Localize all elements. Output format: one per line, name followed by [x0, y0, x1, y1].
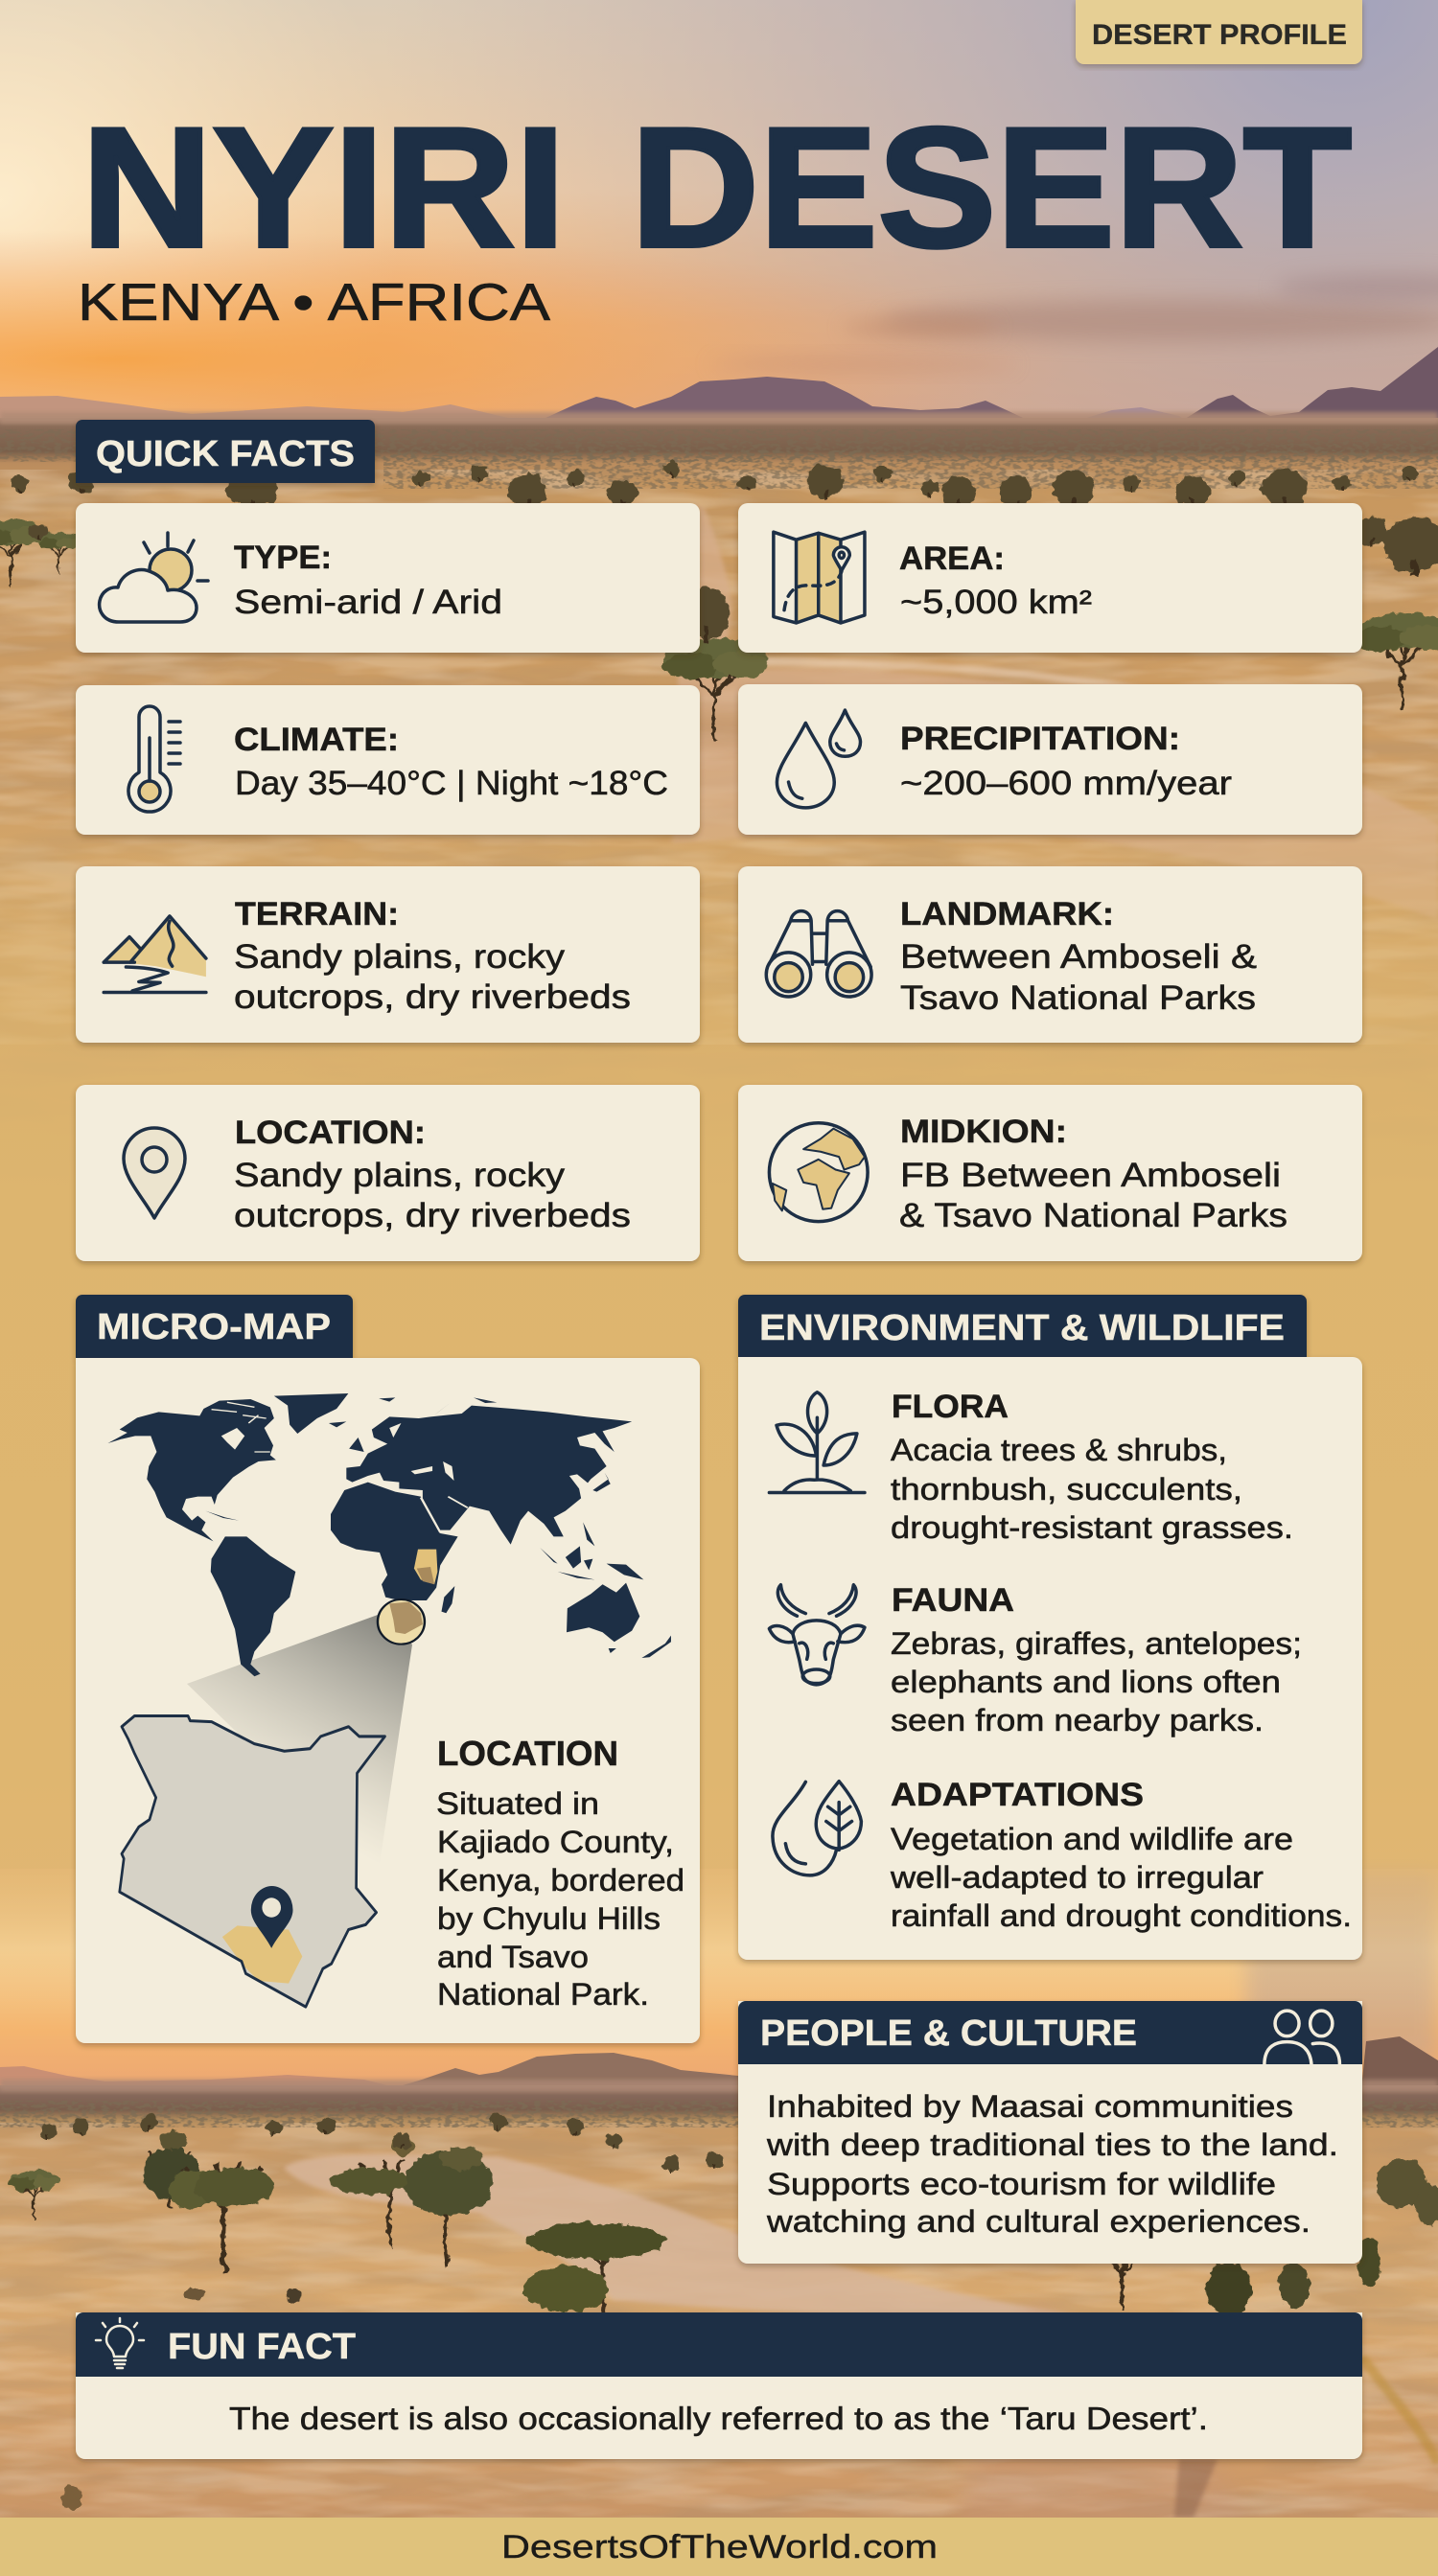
icon: binoculars — [766, 911, 871, 997]
panel body — [76, 1358, 700, 2043]
panel: people and culture: with deep traditional ties to the land. — [766, 2128, 1338, 2162]
card: midkion: & Tsavo National Parks — [899, 1197, 1287, 1234]
kenya highlight — [414, 1550, 437, 1584]
panel: people and culture: Supports eco-tourism for wildlife — [767, 2167, 1276, 2201]
heading: people and culture: PEOPLE & CULTURE — [760, 2013, 1137, 2054]
icon: water drops — [777, 710, 860, 808]
panel: environment and wildlife: ADAPTATIONS — [891, 1777, 1144, 1813]
card: midkion — [738, 1085, 1362, 1261]
card: midkion: MIDKION: — [900, 1114, 1067, 1150]
panel: people and culture: Inhabited by Maasai communities — [767, 2089, 1293, 2124]
card: location — [76, 1085, 700, 1261]
kenya map — [120, 1716, 384, 2007]
background: lower savanna scene — [0, 1869, 1438, 2576]
heading: quick facts — [76, 420, 375, 483]
card: precipitation: ~200–600 mm/year — [900, 765, 1232, 802]
panel: people and culture: watching and cultural experiences. — [766, 2204, 1310, 2239]
heading bar — [76, 2312, 1362, 2377]
card: precipitation — [738, 684, 1362, 835]
card: type: TYPE: — [234, 540, 332, 576]
location text: Situated in — [436, 1786, 599, 1821]
icon: antelope head — [769, 1585, 865, 1685]
panel body — [738, 1357, 1362, 1960]
panel: environment and wildlife — [738, 1295, 1362, 1960]
panel: fun fact: FUN FACT — [168, 2327, 356, 2367]
card: landmark — [738, 866, 1362, 1043]
card: landmark: Tsavo National Parks — [900, 979, 1256, 1017]
panel: environment and wildlife: thornbush, succulents, — [891, 1472, 1242, 1506]
location text: Kajiado County, — [437, 1825, 674, 1859]
card: terrain: TERRAIN: — [235, 896, 399, 932]
icon: plant — [769, 1392, 865, 1493]
background: upper savanna scene — [0, 0, 1438, 1376]
region highlight — [222, 1925, 302, 1984]
card: climate: Day 35–40°C | Night ~18°C — [235, 765, 668, 802]
icon: drop and leaf — [773, 1782, 861, 1875]
card: area — [738, 503, 1362, 653]
card: terrain: Sandy plains, rocky — [234, 938, 566, 976]
location text: by Chyulu Hills — [437, 1901, 661, 1936]
panel: environment and wildlife: rainfall and drought conditions. — [891, 1898, 1352, 1933]
desert profile tag — [1076, 0, 1362, 64]
panel: people and culture — [738, 2001, 1362, 2264]
heading: quick facts: QUICK FACTS — [96, 434, 355, 474]
panel: environment and wildlife: Acacia trees & shrubs, — [891, 1433, 1227, 1467]
card: precipitation: PRECIPITATION: — [900, 721, 1180, 757]
panel: environment and wildlife: FLORA — [892, 1389, 1009, 1425]
title: NYIRI — [81, 92, 566, 283]
title: DESERT — [631, 92, 1352, 283]
location text — [436, 1734, 684, 2012]
panel: fun fact: The desert is also occasionally referred to as the ‘Taru Desert’. — [229, 2401, 1208, 2436]
subtitle: KENYA • AFRICA — [78, 272, 550, 332]
heading: micro-map: MICRO-MAP — [97, 1307, 331, 1347]
zoom cone — [187, 1615, 412, 1871]
card: location: LOCATION: — [235, 1115, 426, 1151]
card: climate — [76, 685, 700, 835]
card: area: AREA: — [899, 540, 1005, 577]
location text: LOCATION — [437, 1734, 618, 1773]
icon: people — [1264, 2011, 1339, 2065]
card: terrain: outcrops, dry riverbeds — [234, 978, 631, 1016]
heading: environment and wildlife: ENVIRONMENT & WILDLIFE — [759, 1308, 1285, 1348]
desert profile tag: DESERT PROFILE — [1092, 19, 1347, 51]
location text: and Tsavo — [437, 1940, 589, 1974]
panel: environment and wildlife: seen from nearby parks. — [891, 1703, 1264, 1737]
icon: thermometer — [128, 706, 180, 812]
panel: environment and wildlife: FAUNA — [892, 1582, 1014, 1619]
card: landmark: Between Amboseli & — [900, 938, 1257, 976]
card: area: ~5,000 km² — [900, 584, 1092, 621]
highlight darker region — [417, 1567, 434, 1584]
footer: DesertsOfTheWorld.com — [501, 2529, 938, 2565]
panel: micro-map — [76, 1295, 700, 2043]
card: climate: CLIMATE: — [234, 722, 399, 758]
panel: environment and wildlife: drought-resistant grasses. — [891, 1510, 1293, 1545]
card: landmark: LANDMARK: — [900, 896, 1114, 932]
icon: dunes and peaks — [104, 916, 206, 993]
title — [81, 92, 1352, 283]
magnifier circle — [378, 1599, 425, 1644]
panel: environment and wildlife: Vegetation and wildlife are — [891, 1822, 1293, 1856]
location text: Kenya, bordered — [437, 1863, 684, 1898]
card: type: Semi-arid / Arid — [234, 584, 502, 621]
card: type — [76, 503, 700, 653]
panel: fun fact — [76, 2312, 1362, 2459]
background: sand gold fade — [0, 757, 1438, 2003]
icon: light bulb — [96, 2318, 144, 2368]
icon: sun and cloud — [100, 533, 208, 622]
card: midkion: FB Between Amboseli — [900, 1157, 1281, 1194]
card: location: Sandy plains, rocky — [234, 1157, 566, 1194]
footer — [0, 2518, 1438, 2576]
heading bar — [738, 2001, 1362, 2064]
panel: environment and wildlife: well-adapted to irregular — [890, 1860, 1264, 1895]
icon: map pin — [124, 1128, 185, 1218]
icon: globe — [769, 1123, 868, 1222]
card: terrain — [76, 866, 700, 1043]
map pin — [251, 1886, 293, 1948]
icon: folded map — [774, 532, 865, 623]
world map — [107, 1393, 671, 1676]
card: location: outcrops, dry riverbeds — [234, 1197, 631, 1234]
panel: environment and wildlife: elephants and lions often — [891, 1665, 1281, 1699]
location text: National Park. — [437, 1977, 649, 2012]
panel: environment and wildlife: Zebras, giraffes, antelopes; — [891, 1626, 1302, 1661]
